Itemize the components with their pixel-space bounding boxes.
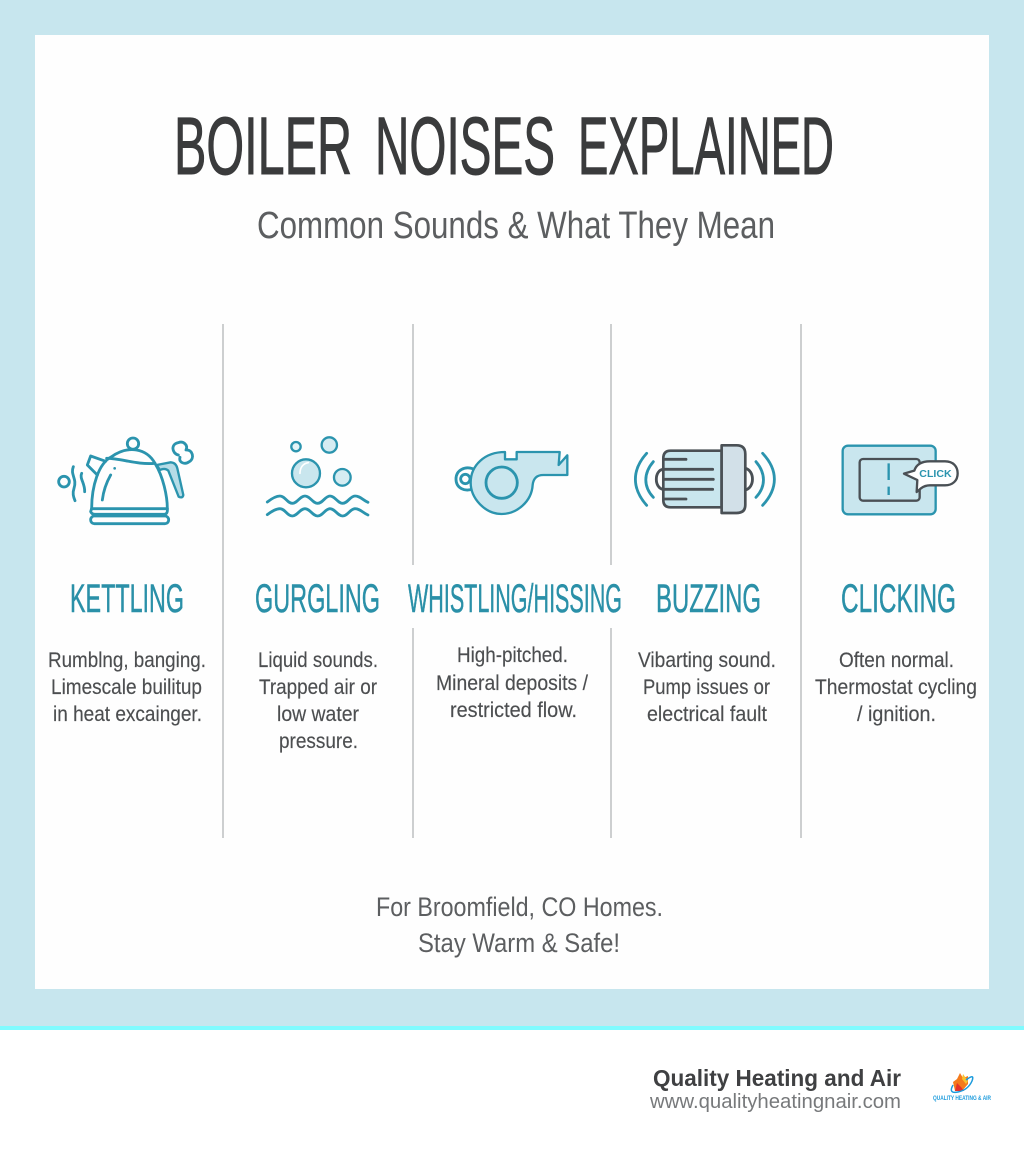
title: BOILER — [174, 101, 352, 192]
description: Thermostat cycling — [815, 676, 977, 699]
footer brand name and website: Quality Heating and Air — [653, 1065, 901, 1091]
icon: bubbles and waves — [267, 437, 368, 516]
description: Mineral deposits / — [436, 672, 588, 695]
description: restricted flow. — [450, 699, 577, 722]
column: clicking — [815, 446, 977, 726]
description: low water — [277, 703, 359, 726]
closing message: For Broomfield, CO Homes. — [376, 892, 663, 922]
white main panel — [35, 35, 989, 989]
description: electrical fault — [647, 703, 767, 726]
column: gurgling — [255, 437, 380, 753]
title — [174, 101, 834, 192]
column: whistling/hissing — [408, 452, 622, 722]
logo: Quality Heating & Air: QUALITY HEATING & AIR — [933, 1096, 992, 1102]
footer brand name and website: www.qualityheatingnair.com — [649, 1091, 901, 1113]
logo: Quality Heating & Air — [933, 1073, 992, 1102]
description: Limescale builitup — [51, 676, 202, 699]
closing message — [376, 892, 663, 958]
description: / ignition. — [857, 703, 936, 726]
icon: thermostat click: CLICK — [919, 469, 952, 480]
closing message: Stay Warm & Safe! — [418, 928, 620, 958]
description: Liquid sounds. — [258, 649, 378, 672]
column: buzzing — [635, 445, 776, 726]
footer brand name and website — [649, 1065, 901, 1113]
description: Pump issues or — [643, 676, 770, 699]
heading: BUZZING — [656, 577, 761, 621]
icon: whistle — [456, 452, 567, 514]
heading: GURGLING — [255, 577, 380, 621]
description: Rumblng, banging. — [48, 649, 206, 672]
description — [638, 649, 776, 726]
icon: vibrating pump — [635, 445, 774, 513]
description: Trapped air or — [259, 676, 377, 699]
heading: WHISTLING/HISSING — [408, 577, 622, 621]
description — [48, 649, 206, 726]
subtitle: Common Sounds & What They Mean — [257, 205, 775, 247]
description — [258, 649, 378, 753]
icon: thermostat click — [843, 446, 958, 514]
column: kettling — [48, 438, 206, 726]
description: Vibarting sound. — [638, 649, 776, 672]
description: pressure. — [279, 730, 358, 753]
icon: kettle — [59, 438, 193, 524]
description — [815, 649, 977, 726]
description: Often normal. — [839, 649, 954, 672]
heading: KETTLING — [70, 577, 184, 621]
description: in heat excainger. — [53, 703, 202, 726]
description: High-pitched. — [457, 644, 568, 667]
description — [436, 644, 588, 722]
title: NOISES — [375, 101, 555, 192]
